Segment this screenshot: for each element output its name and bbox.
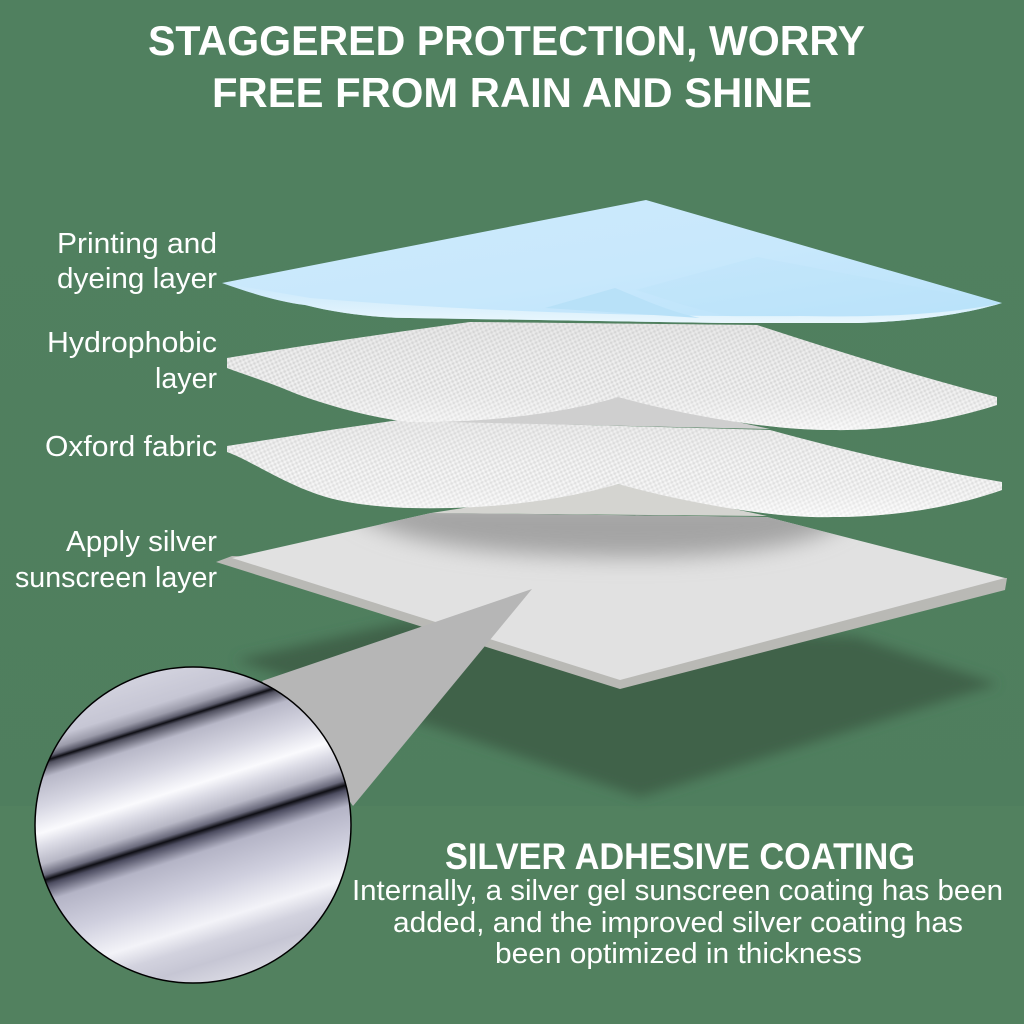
label: hydrophobic layer xyxy=(47,327,217,395)
label: hydrophobic layer: layer xyxy=(155,363,217,395)
callout wedge xyxy=(262,589,532,806)
zoom circle: silver coating close-up xyxy=(35,667,351,983)
label: hydrophobic layer: Hydrophobic xyxy=(47,327,217,359)
label: printing and dyeing layer xyxy=(57,228,217,295)
description text: been optimized in thickness xyxy=(495,938,862,970)
description text: Internally, a silver gel sunscreen coating has been xyxy=(352,875,1003,907)
description text xyxy=(352,875,1003,970)
layer: oxford fabric xyxy=(227,420,1002,517)
heading: silver adhesive coating: SILVER ADHESIVE COATING xyxy=(445,836,915,877)
label: apply silver sunscreen layer: sunscreen layer xyxy=(15,562,217,594)
label: printing and dyeing layer: dyeing layer xyxy=(57,263,217,295)
label: apply silver sunscreen layer: Apply silver xyxy=(66,526,217,558)
label: printing and dyeing layer: Printing and xyxy=(57,228,217,260)
layer: printing and dyeing xyxy=(222,200,1002,323)
layer: hydrophobic xyxy=(227,322,997,430)
label: oxford fabric: Oxford fabric xyxy=(45,431,217,463)
title xyxy=(148,17,865,116)
layer: silver sunscreen sheet xyxy=(216,500,1007,689)
ground shadow xyxy=(236,622,998,797)
description text: added, and the improved silver coating has xyxy=(393,907,963,939)
title: FREE FROM RAIN AND SHINE xyxy=(212,69,812,116)
lower band xyxy=(0,806,1024,1024)
title: STAGGERED PROTECTION, WORRY xyxy=(148,17,865,64)
label: apply silver sunscreen layer xyxy=(15,526,217,594)
